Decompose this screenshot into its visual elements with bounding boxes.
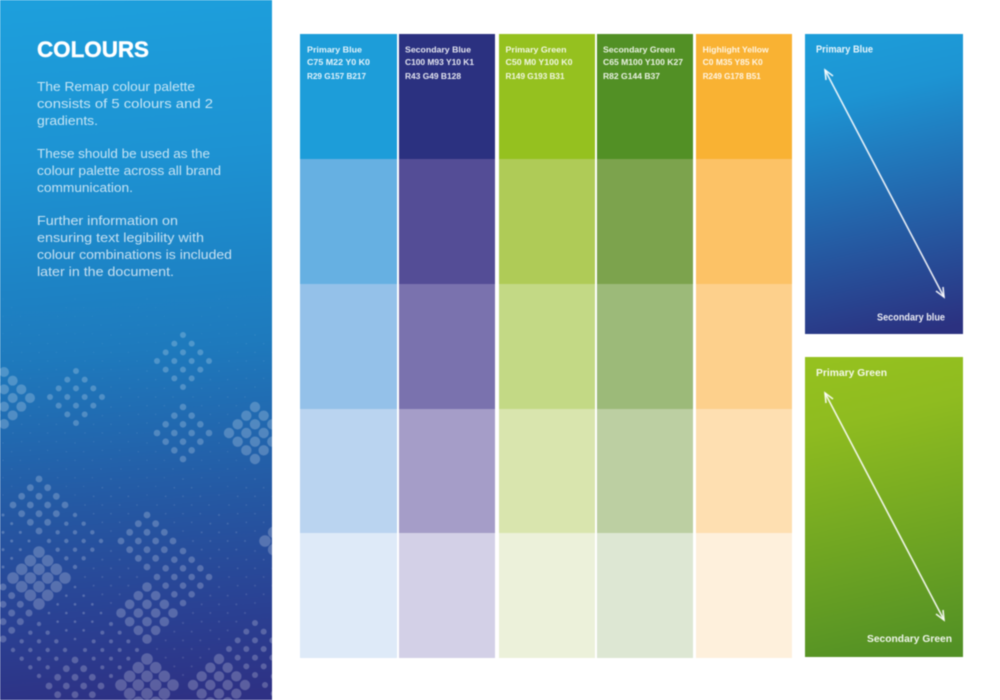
arrow: green gradient direction (825, 393, 944, 620)
text block: intro paragraphs: The Remap colour palette (37, 80, 195, 94)
column: highlight yellow: C0 M35 Y85 K0 (703, 58, 763, 67)
text block: intro paragraphs: communication. (37, 181, 133, 195)
column: secondary blue: R43 G49 B128 (405, 72, 462, 81)
column: primary green: Primary Green (506, 46, 567, 54)
text block: intro paragraphs: gradients. (37, 114, 98, 128)
sidebar gradient background (0, 0, 272, 700)
column: primary blue: R29 G157 B217 (307, 72, 367, 81)
text block: intro paragraphs: These should be used as the (37, 147, 210, 161)
text block: intro paragraphs: ensuring text legibility with (37, 231, 204, 245)
halftone dot pattern (0, 332, 272, 700)
text block: intro paragraphs: later in the document. (37, 265, 174, 279)
label: secondary green: Secondary Green (867, 634, 952, 645)
column: highlight yellow: R249 G178 B51 (703, 72, 761, 81)
column: primary blue: Primary Blue (307, 46, 363, 54)
column: secondary green (597, 34, 693, 658)
label: primary green: Primary Green (816, 368, 887, 379)
column: secondary blue (399, 34, 495, 658)
arrow: blue gradient direction (825, 70, 944, 297)
column: secondary green: C65 M100 Y100 K27 (603, 58, 684, 67)
label: primary blue: Primary Blue (816, 44, 873, 56)
column: secondary green: R82 G144 B37 (603, 72, 661, 81)
text block: intro paragraphs: colour palette across all brand (37, 164, 221, 178)
panel: sidebar (0, 0, 273, 700)
text block: intro paragraphs (37, 80, 232, 279)
heading: Colours: COLOURS (37, 37, 149, 62)
panel: green gradient (805, 357, 963, 657)
column: highlight yellow: Highlight Yellow (703, 46, 770, 54)
text block: intro paragraphs: consists of 5 colours and 2 (37, 97, 213, 111)
column: primary green (499, 34, 595, 658)
label: secondary blue: Secondary blue (877, 312, 945, 324)
panel: colour palette (300, 34, 792, 658)
panel: blue gradient (805, 34, 963, 334)
text block: intro paragraphs: colour combinations is included (37, 248, 232, 262)
column: primary green: R149 G193 B31 (506, 72, 565, 81)
column: primary blue: C75 M22 Y0 K0 (307, 58, 371, 67)
column: primary green: C50 M0 Y100 K0 (506, 58, 573, 67)
column: secondary blue: Secondary Blue (405, 46, 472, 54)
column: highlight yellow (696, 34, 792, 658)
column: secondary blue: C100 M93 Y10 K1 (405, 58, 475, 67)
text block: intro paragraphs: Further information on (37, 214, 178, 228)
column: secondary green: Secondary Green (603, 46, 675, 54)
column: primary blue (300, 34, 397, 658)
